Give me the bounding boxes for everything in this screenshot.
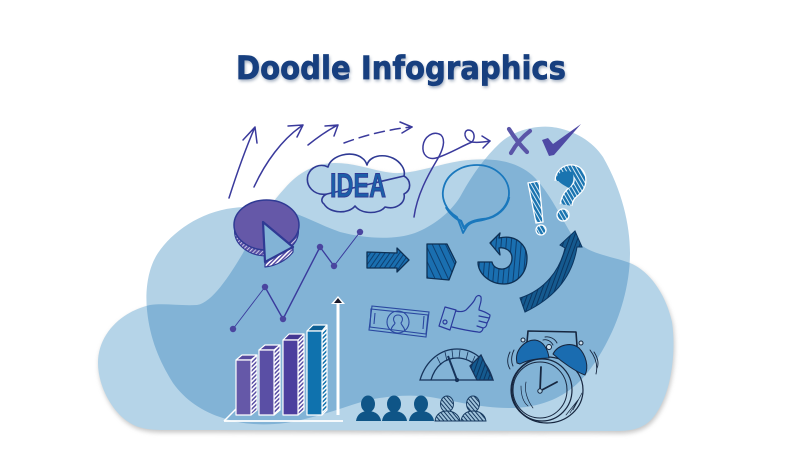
title: Doodle Infographics (236, 49, 566, 87)
looped arrow (414, 130, 490, 217)
infographic canvas (96, 54, 677, 436)
vertical axis arrow (331, 296, 345, 415)
icon: pentagon (427, 244, 456, 280)
icon: bar chart with axis (224, 296, 345, 421)
icon: pie chart (234, 200, 299, 267)
icon: check mark (542, 124, 581, 156)
audience people icons (356, 396, 486, 421)
clock body (511, 357, 583, 423)
icon: exclamation mark (528, 181, 546, 235)
doodle arrows (229, 122, 412, 198)
icon: thumbs up (439, 296, 490, 332)
clock hands (538, 367, 557, 393)
icon: x mark (509, 129, 530, 153)
title: Doodle Infographics (237, 51, 567, 89)
icon: curved up arrow (520, 231, 582, 312)
bar 2 (259, 345, 280, 415)
line chart (230, 229, 363, 332)
icon: speedometer gauge (420, 349, 493, 382)
icon: speech bubble (443, 165, 509, 233)
icon: banknote (369, 306, 429, 337)
icon: alarm clock (508, 331, 598, 423)
background cloud blobs (98, 127, 674, 433)
icon: circular arrow (478, 233, 527, 284)
bar 1 (236, 355, 257, 415)
icon: block arrow (367, 248, 409, 272)
bar 4 (307, 325, 327, 415)
idea word: IDEA (330, 167, 386, 205)
icon: question mark (556, 171, 580, 221)
idea thought cloud (307, 154, 410, 212)
clock handle (527, 331, 577, 346)
clock bells (516, 338, 587, 375)
bar 3 (283, 334, 304, 415)
vibration lines (508, 337, 598, 374)
